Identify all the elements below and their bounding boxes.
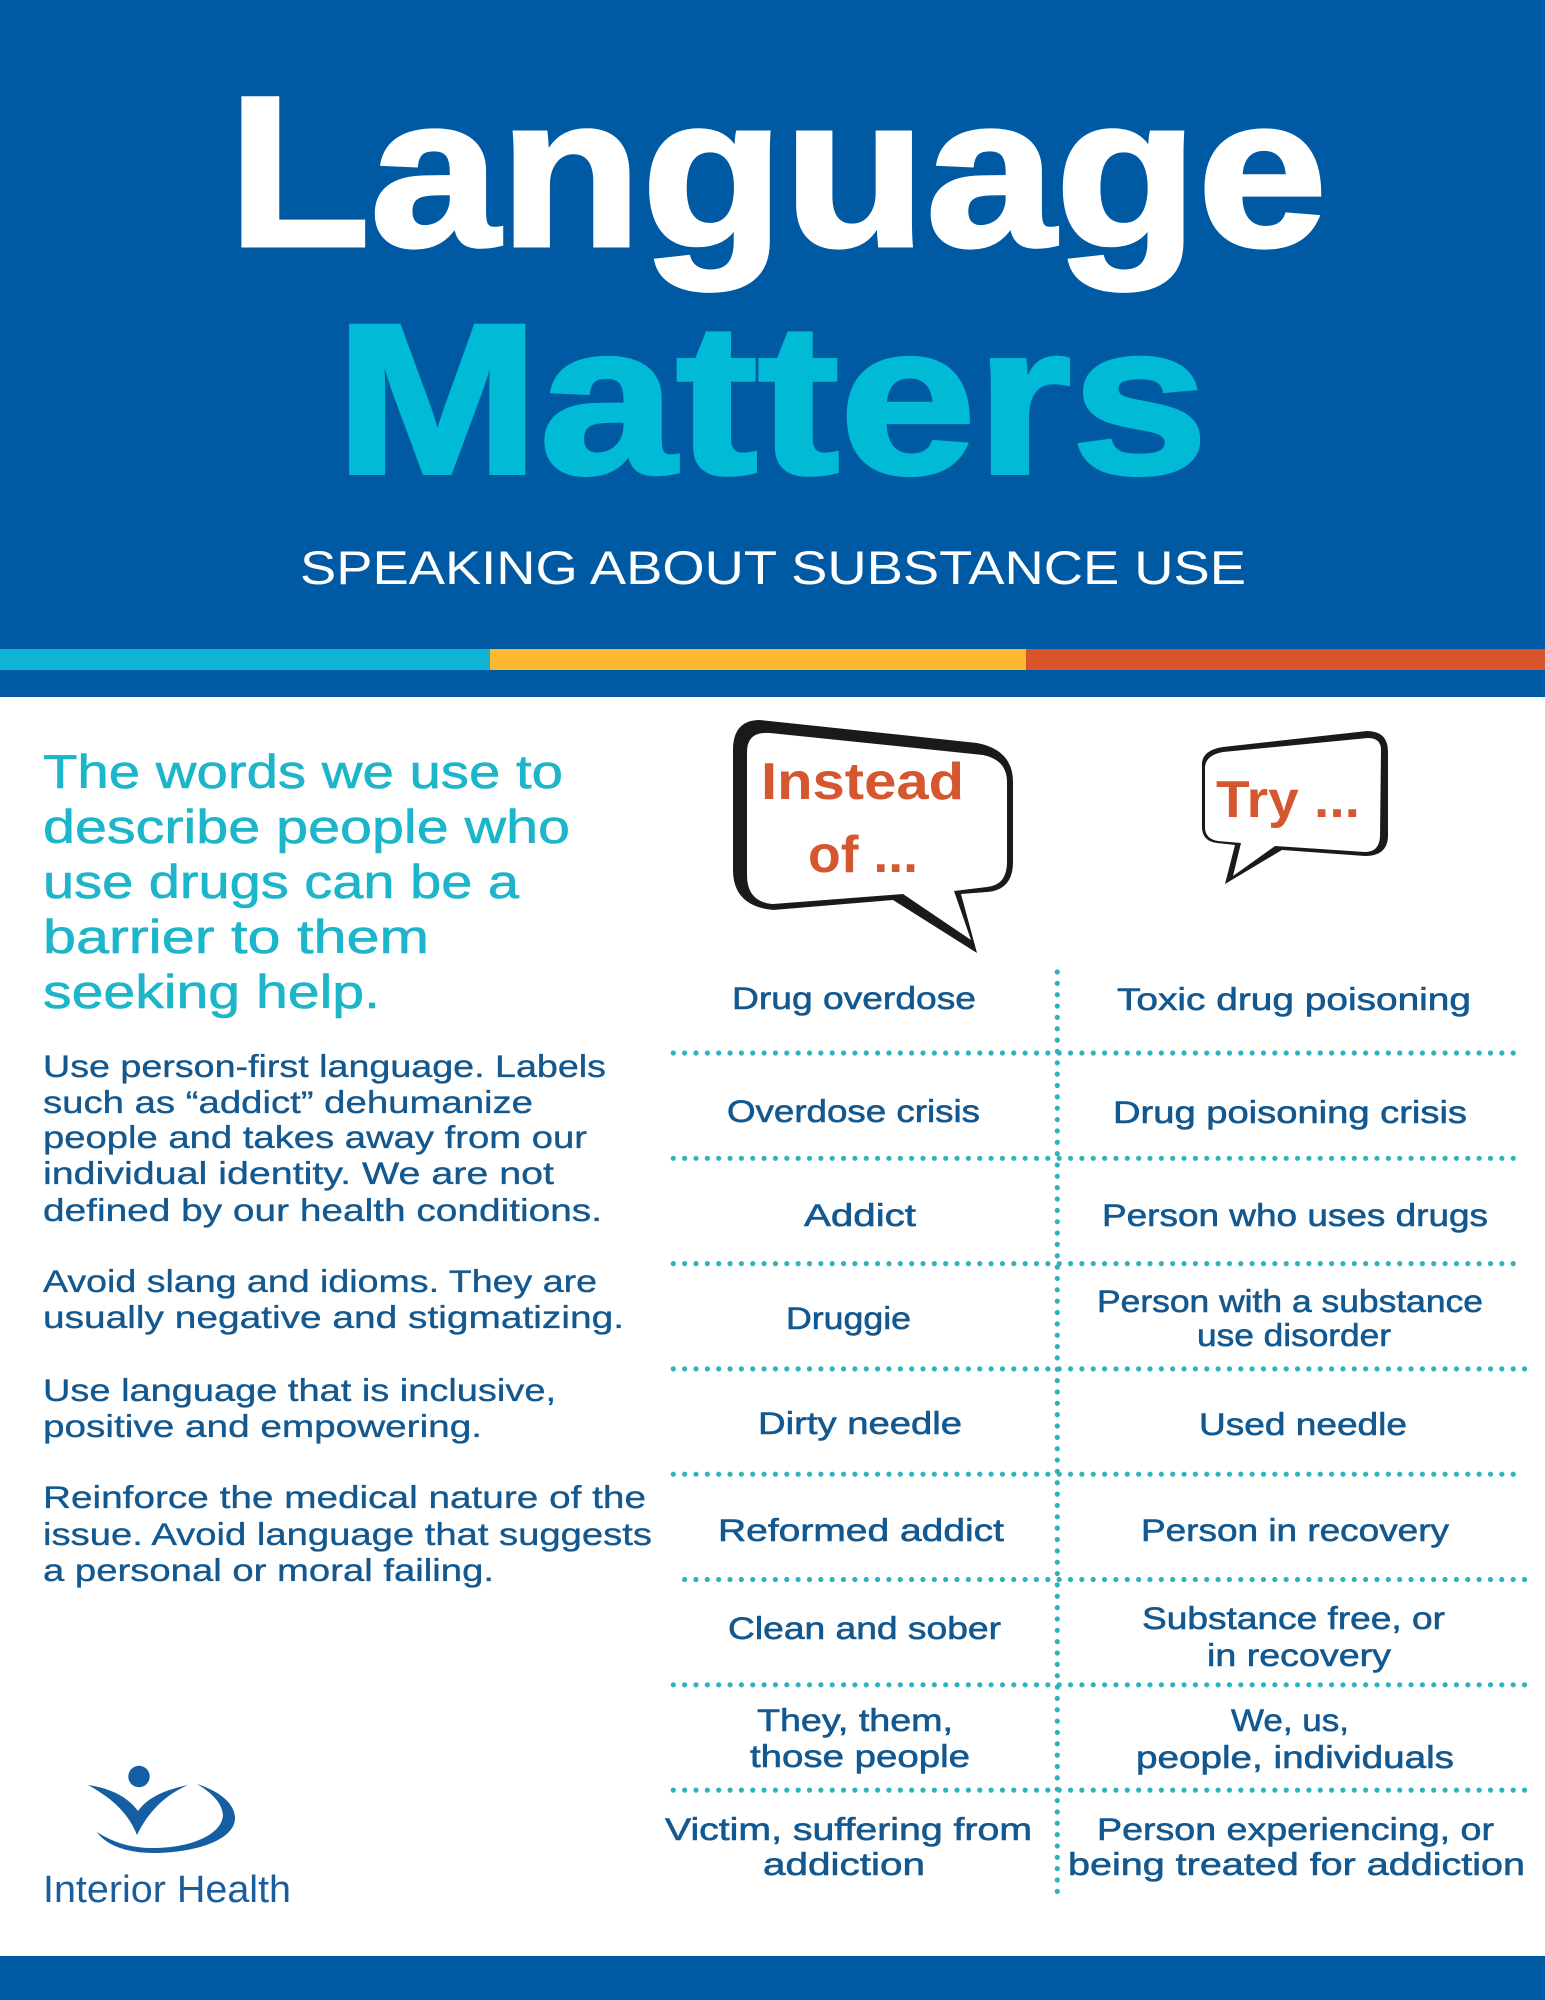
body text: medical nature: a personal or moral failing. <box>43 1552 494 1588</box>
body text: inclusive language: positive and empowering. <box>43 1408 482 1444</box>
table: instead of column: Victim, suffering from <box>665 1811 1032 1847</box>
speech bubble: try <box>1202 731 1388 884</box>
table: try column: use disorder <box>1197 1317 1391 1353</box>
logo: Interior Health: Interior Health <box>43 1869 291 1911</box>
table: try column: being treated for addiction <box>1068 1846 1525 1882</box>
table: instead of column: addiction <box>763 1846 925 1882</box>
table grid dividers <box>673 972 1532 1895</box>
body text: person-first language <box>43 1048 606 1228</box>
lead statement: The words we use to <box>43 745 563 798</box>
lead statement: seeking help. <box>43 965 380 1018</box>
table: try column: Person with a substance <box>1097 1283 1483 1319</box>
speech bubble: try: Try ... <box>1216 771 1360 829</box>
body text: person-first language: Use person-first language. Labels <box>43 1048 606 1084</box>
table: instead of column: Reformed addict <box>718 1512 1004 1548</box>
body text: medical nature <box>43 1479 652 1588</box>
colour stripe <box>0 649 1545 670</box>
body text: person-first language: people and takes away from our <box>43 1119 587 1155</box>
logo: Interior Health <box>43 1766 291 1911</box>
table: try column: Toxic drug poisoning <box>1117 981 1471 1017</box>
header band <box>0 0 1545 697</box>
body text: avoid slang <box>43 1263 624 1335</box>
table: try column: Person in recovery <box>1141 1512 1449 1548</box>
speech bubble: instead of <box>733 720 1013 953</box>
subtitle: SPEAKING ABOUT SUBSTANCE USE <box>300 541 1246 594</box>
table: instead of column: Overdose crisis <box>727 1093 980 1129</box>
body text: medical nature: issue. Avoid language that suggests <box>43 1516 652 1552</box>
lead statement <box>43 745 570 1018</box>
table: try column: Person who uses drugs <box>1102 1197 1488 1233</box>
table: try column: Person experiencing, or <box>1097 1811 1494 1847</box>
table: instead of column: those people <box>750 1738 970 1774</box>
body text: medical nature: Reinforce the medical nature of the <box>43 1479 646 1515</box>
title: Language <box>228 52 1327 292</box>
table: try column: We, us, <box>1231 1702 1349 1738</box>
body text: person-first language: individual identity. We are not <box>43 1155 554 1191</box>
speech bubble: instead of: Instead <box>761 753 964 811</box>
table: try column <box>1068 981 1525 1882</box>
table: instead of column: Clean and sober <box>728 1610 1001 1646</box>
body text: person-first language: defined by our health conditions. <box>43 1192 602 1228</box>
table: try column: in recovery <box>1207 1637 1391 1673</box>
table: instead of column <box>665 980 1032 1882</box>
table: instead of column: Druggie <box>786 1300 911 1336</box>
table: instead of column: Dirty needle <box>758 1405 962 1441</box>
table: instead of column: Addict <box>804 1197 916 1233</box>
footer band <box>0 1956 1545 2000</box>
table: instead of column: Drug overdose <box>732 980 976 1016</box>
body text: inclusive language <box>43 1372 556 1444</box>
body text: inclusive language: Use language that is inclusive, <box>43 1372 556 1408</box>
lead statement: describe people who <box>43 800 570 853</box>
table: instead of column: They, them, <box>757 1702 953 1738</box>
title <box>228 52 1327 519</box>
lead statement: use drugs can be a <box>43 855 520 908</box>
table: try column: Substance free, or <box>1142 1600 1445 1636</box>
title: Matters <box>335 280 1208 519</box>
body text: person-first language: such as “addict” dehumanize <box>43 1084 533 1120</box>
table: try column: Drug poisoning crisis <box>1113 1094 1467 1130</box>
table: try column: Used needle <box>1199 1406 1407 1442</box>
body text: avoid slang: Avoid slang and idioms. They are <box>43 1263 597 1299</box>
body text: avoid slang: usually negative and stigmatizing. <box>43 1299 624 1335</box>
table: try column: people, individuals <box>1136 1739 1454 1775</box>
lead statement: barrier to them <box>43 910 429 963</box>
speech bubble: instead of: of ... <box>808 826 918 884</box>
